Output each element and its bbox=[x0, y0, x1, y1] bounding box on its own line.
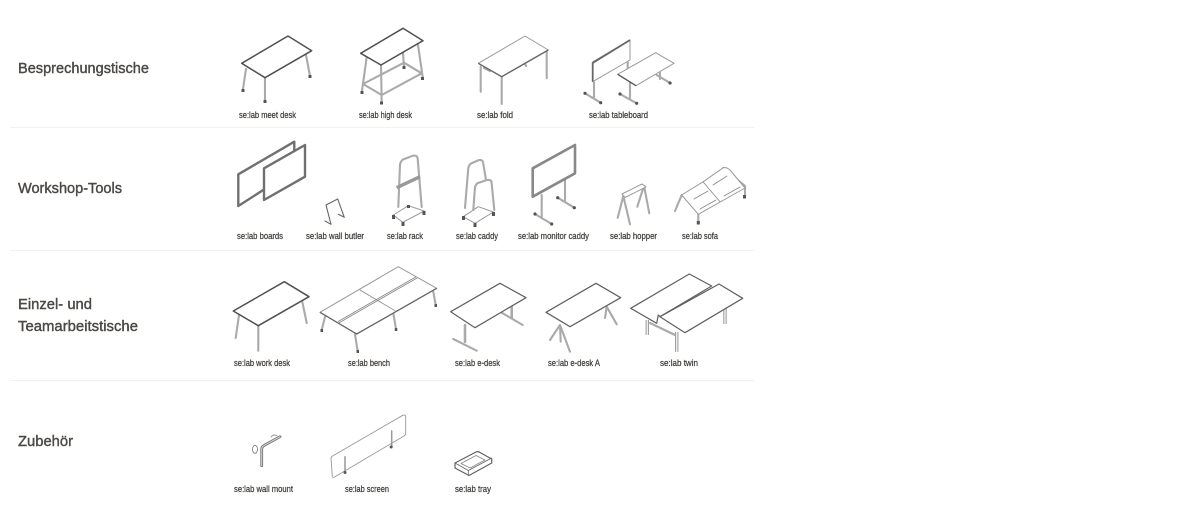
product: se:lab bench bbox=[320, 267, 437, 369]
product: se:lab high desk: se:lab high desk bbox=[359, 110, 412, 121]
heading: Besprechungstische: Besprechungstische bbox=[18, 60, 149, 77]
panel: Besprechungstische bbox=[18, 28, 674, 121]
product: se:lab hopper bbox=[610, 184, 657, 242]
product: se:lab tableboard bbox=[583, 40, 674, 121]
product: se:lab e-desk bbox=[451, 283, 526, 369]
product: se:lab wall mount: se:lab wall mount bbox=[234, 484, 293, 495]
heading: Einzel- und Teamarbeitstische: Einzel- und bbox=[18, 296, 92, 313]
product: se:lab tray: se:lab tray bbox=[455, 484, 491, 495]
product: se:lab sofa bbox=[675, 168, 746, 242]
product: se:lab e-desk A bbox=[546, 283, 621, 369]
product: se:lab bench: se:lab bench bbox=[348, 358, 390, 369]
product: se:lab high desk bbox=[359, 28, 424, 121]
product: se:lab wall mount bbox=[234, 435, 293, 495]
product: se:lab meet desk: se:lab meet desk bbox=[239, 110, 296, 121]
product: se:lab wall butler bbox=[306, 199, 364, 242]
product: se:lab monitor caddy bbox=[518, 145, 589, 242]
heading: Workshop-Tools: Workshop-Tools bbox=[18, 180, 122, 197]
heading: Einzel- und Teamarbeitstische: Teamarbeitstische bbox=[18, 318, 138, 335]
product: se:lab sofa: se:lab sofa bbox=[682, 231, 719, 242]
product: se:lab wall butler: se:lab wall butler bbox=[306, 231, 364, 242]
product: se:lab screen: se:lab screen bbox=[345, 484, 389, 495]
product: se:lab screen bbox=[331, 415, 406, 495]
product: se:lab fold bbox=[477, 36, 548, 121]
heading: Einzel- und Teamarbeitstische bbox=[18, 296, 138, 335]
product: se:lab caddy bbox=[456, 160, 498, 242]
product: se:lab e-desk A: se:lab e-desk A bbox=[548, 358, 601, 369]
panel: Einzel- und Teamarbeitstische bbox=[18, 267, 743, 369]
product: se:lab hopper: se:lab hopper bbox=[610, 231, 657, 242]
product: se:lab tableboard: se:lab tableboard bbox=[589, 110, 648, 121]
heading: Zubehör: Zubehör bbox=[18, 433, 73, 450]
product: se:lab fold: se:lab fold bbox=[477, 110, 513, 121]
product: se:lab meet desk bbox=[239, 36, 312, 121]
product: se:lab boards: se:lab boards bbox=[237, 231, 283, 242]
product: se:lab tray bbox=[455, 452, 492, 495]
panel: Workshop-Tools bbox=[18, 142, 746, 242]
product: se:lab monitor caddy: se:lab monitor caddy bbox=[518, 231, 589, 242]
panel: Zubehör bbox=[18, 415, 492, 495]
product: se:lab boards bbox=[237, 142, 305, 242]
product: se:lab work desk: se:lab work desk bbox=[234, 358, 290, 369]
product: se:lab twin: se:lab twin bbox=[660, 358, 698, 369]
product: se:lab rack: se:lab rack bbox=[387, 231, 423, 242]
product: se:lab caddy: se:lab caddy bbox=[456, 231, 498, 242]
product: se:lab e-desk: se:lab e-desk bbox=[455, 358, 500, 369]
product: se:lab rack bbox=[387, 156, 426, 242]
product: se:lab work desk bbox=[233, 282, 309, 369]
product: se:lab twin bbox=[631, 274, 743, 369]
